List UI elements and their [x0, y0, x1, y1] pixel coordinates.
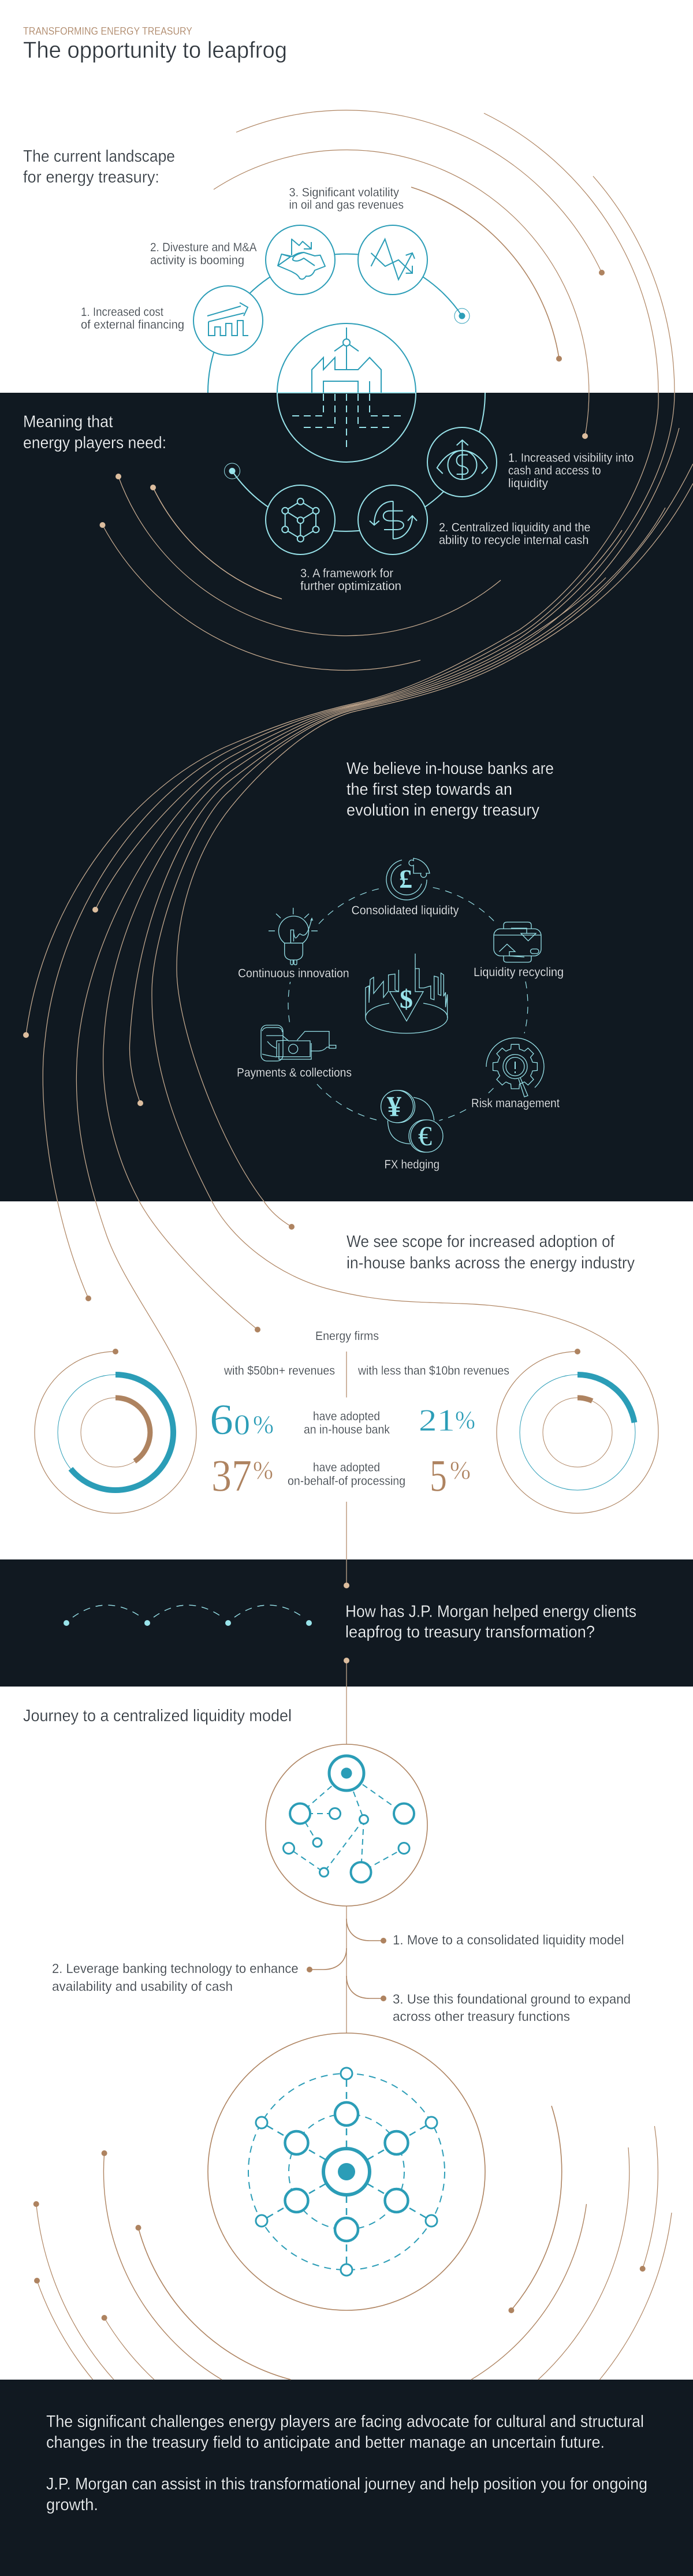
heading: how J.P. Morgan helped: leapfrog to treasury transformation?	[345, 1623, 595, 1641]
label: divesture: 2. Divesture and M&A	[150, 241, 257, 254]
heading: current landscape: for energy treasury:	[23, 168, 159, 187]
icon: visibility eye with dollar	[427, 427, 497, 497]
closing text: growth.	[46, 2496, 98, 2514]
icon: recycling dollar	[358, 485, 427, 554]
label: visibility: 1. Increased visibility into	[508, 452, 634, 464]
teal landscape arc connector	[208, 254, 462, 393]
icon: payments and collections	[261, 1025, 336, 1061]
heading: scope for adoption: We see scope for increased adoption of	[346, 1233, 615, 1251]
icon: risk management gear	[486, 1038, 544, 1097]
callout: step 3: across other treasury functions	[393, 2009, 570, 2024]
icon: FX coins	[381, 1090, 443, 1152]
label: risk management: Risk management	[471, 1097, 560, 1110]
label: volatility	[289, 186, 404, 211]
icon: FX coins: ¥	[387, 1090, 401, 1122]
heading: in-house banks belief: the first step towards an	[346, 780, 512, 799]
closing text	[46, 2413, 647, 2514]
header	[23, 25, 287, 63]
label: consolidated liquidity: Consolidated liquidity	[351, 904, 459, 917]
icon: rising cost chart	[193, 286, 263, 355]
icon: cyan target dot	[224, 463, 240, 479]
heading: how J.P. Morgan helped	[345, 1602, 636, 1641]
callout: step 1: 1. Move to a consolidated liquidity model	[393, 1933, 624, 1948]
statistic: 60 percent: %	[253, 1410, 274, 1439]
dashed treasury evolution ring	[288, 888, 528, 1121]
icon: FX coins: €	[418, 1121, 432, 1152]
label: on-behalf-of adoption	[288, 1461, 405, 1488]
statistic: 37 percent: 37	[211, 1450, 252, 1501]
statistic: 5 percent: %	[450, 1456, 471, 1484]
leapfrog dashed arcs	[64, 1605, 312, 1626]
icon: consolidated liquidity: £	[399, 864, 412, 894]
background: dark question band	[0, 1559, 693, 1687]
label: centralized liquidity: 2. Centralized liquidity and the	[439, 521, 590, 534]
icon: central city with dollar arrow	[366, 954, 448, 1033]
closing text: J.P. Morgan can assist in this transformational journey and help position you for ongoing	[46, 2475, 647, 2493]
callout: step 1	[346, 1919, 624, 1948]
closing text: changes in the treasury field to anticipate and better manage an uncertain future.	[46, 2433, 605, 2452]
heading: scope for adoption: in-house banks across the energy industry	[346, 1254, 635, 1272]
label: continuous innovation: Continuous innovation	[238, 967, 349, 980]
statistic: 21 percent: %	[455, 1406, 475, 1434]
statistic: 5 percent: 5	[430, 1450, 447, 1501]
background: dark needs and evolution section	[0, 393, 693, 1201]
icon: teal target dot	[454, 308, 470, 323]
statistic: 21 percent: 21	[419, 1403, 455, 1438]
label: on-behalf-of adoption: on-behalf-of processing	[288, 1475, 405, 1488]
callout: step 2: 2. Leverage banking technology to enhance	[52, 1961, 299, 1976]
donut chart: firms with $50bn+ revenues	[58, 1375, 173, 1490]
statistic: 5 percent	[430, 1450, 471, 1501]
closing text: The significant challenges energy players are facing advocate for cultural and structural	[46, 2413, 644, 2431]
donut chart: firms with less than $10bn revenues	[520, 1375, 635, 1490]
heading: journey: Journey to a centralized liquidity model	[23, 1707, 292, 1725]
background: dark closing section	[0, 2380, 693, 2576]
diagram: centralized network in circle	[208, 2033, 485, 2310]
icon: central city with dollar arrow: $	[400, 984, 413, 1014]
comparison table heading: with less than $10bn revenues	[357, 1364, 509, 1378]
label: framework: 3. A framework for	[300, 567, 393, 580]
label: centralized liquidity: ability to recycle internal cash	[439, 534, 588, 547]
label: volatility: in oil and gas revenues	[289, 199, 404, 211]
heading: meaning: energy players need:	[23, 434, 166, 452]
icon: energy plant with reflection	[277, 323, 416, 462]
label: divesture	[150, 241, 257, 267]
statistic: 21 percent	[419, 1403, 475, 1438]
label: increased cost: 1. Increased cost	[81, 306, 163, 319]
heading: current landscape: The current landscape	[23, 147, 175, 166]
label: visibility: liquidity	[508, 477, 548, 490]
label: visibility: cash and access to	[508, 464, 601, 477]
statistic: 37 percent: %	[253, 1456, 273, 1484]
icon: consolidated liquidity	[386, 858, 430, 900]
heading: meaning	[23, 412, 166, 452]
heading: in-house banks belief: evolution in energy treasury	[346, 801, 539, 820]
eyebrow: TRANSFORMING ENERGY TREASURY	[23, 25, 192, 37]
label: volatility: 3. Significant volatility	[289, 186, 399, 199]
label: framework: further optimization	[300, 580, 401, 593]
label: increased cost	[81, 306, 184, 332]
callout: step 2: availability and usability of cash	[52, 1979, 233, 1994]
heading: current landscape	[23, 147, 175, 187]
label: visibility	[508, 452, 634, 490]
icon: volatility arrows	[358, 225, 427, 295]
callout: step 3	[346, 1976, 631, 2024]
statistic: 60 percent: 6	[210, 1396, 233, 1444]
comparison table heading: Energy firms	[315, 1330, 379, 1343]
icon: liquidity recycling card	[494, 922, 541, 962]
heading: meaning: Meaning that	[23, 412, 113, 431]
statistic: 60 percent	[210, 1396, 274, 1444]
heading: scope for adoption	[346, 1233, 635, 1272]
comparison table heading: with $50bn+ revenues	[223, 1364, 335, 1378]
diagram: decentralized network in circle	[266, 1744, 427, 1906]
line end dots	[23, 270, 646, 2321]
label: payments and collections: Payments & collections	[237, 1066, 352, 1079]
heading: in-house banks belief	[346, 760, 554, 820]
label: increased cost: of external financing	[81, 318, 184, 332]
icon: framework cube	[266, 485, 335, 554]
label: liquidity recycling: Liquidity recycling	[474, 966, 564, 979]
label: in-house bank adoption: have adopted	[313, 1410, 380, 1423]
cyan needs arc connector	[232, 393, 485, 531]
callout: step 2	[52, 1948, 346, 1994]
icon: handshake	[266, 225, 335, 295]
heading: how J.P. Morgan helped: How has J.P. Morgan helped energy clients	[345, 1602, 636, 1621]
label: FX hedging: FX hedging	[385, 1158, 439, 1171]
heading: in-house banks belief: We believe in-house banks are	[346, 760, 554, 778]
label: on-behalf-of adoption: have adopted	[313, 1461, 380, 1474]
comparison table heading	[223, 1330, 509, 1378]
callout: step 3: 3. Use this foundational ground to expand	[393, 1991, 631, 2007]
label: in-house bank adoption: an in-house bank	[304, 1423, 390, 1436]
title: The opportunity to leapfrog	[23, 38, 287, 63]
statistic: 60 percent: 0	[234, 1408, 250, 1440]
label: centralized liquidity	[439, 521, 590, 547]
label: in-house bank adoption	[304, 1410, 390, 1436]
label: divesture: activity is booming	[150, 254, 244, 267]
icon: continuous innovation bulb	[269, 908, 318, 965]
label: framework	[300, 567, 401, 593]
